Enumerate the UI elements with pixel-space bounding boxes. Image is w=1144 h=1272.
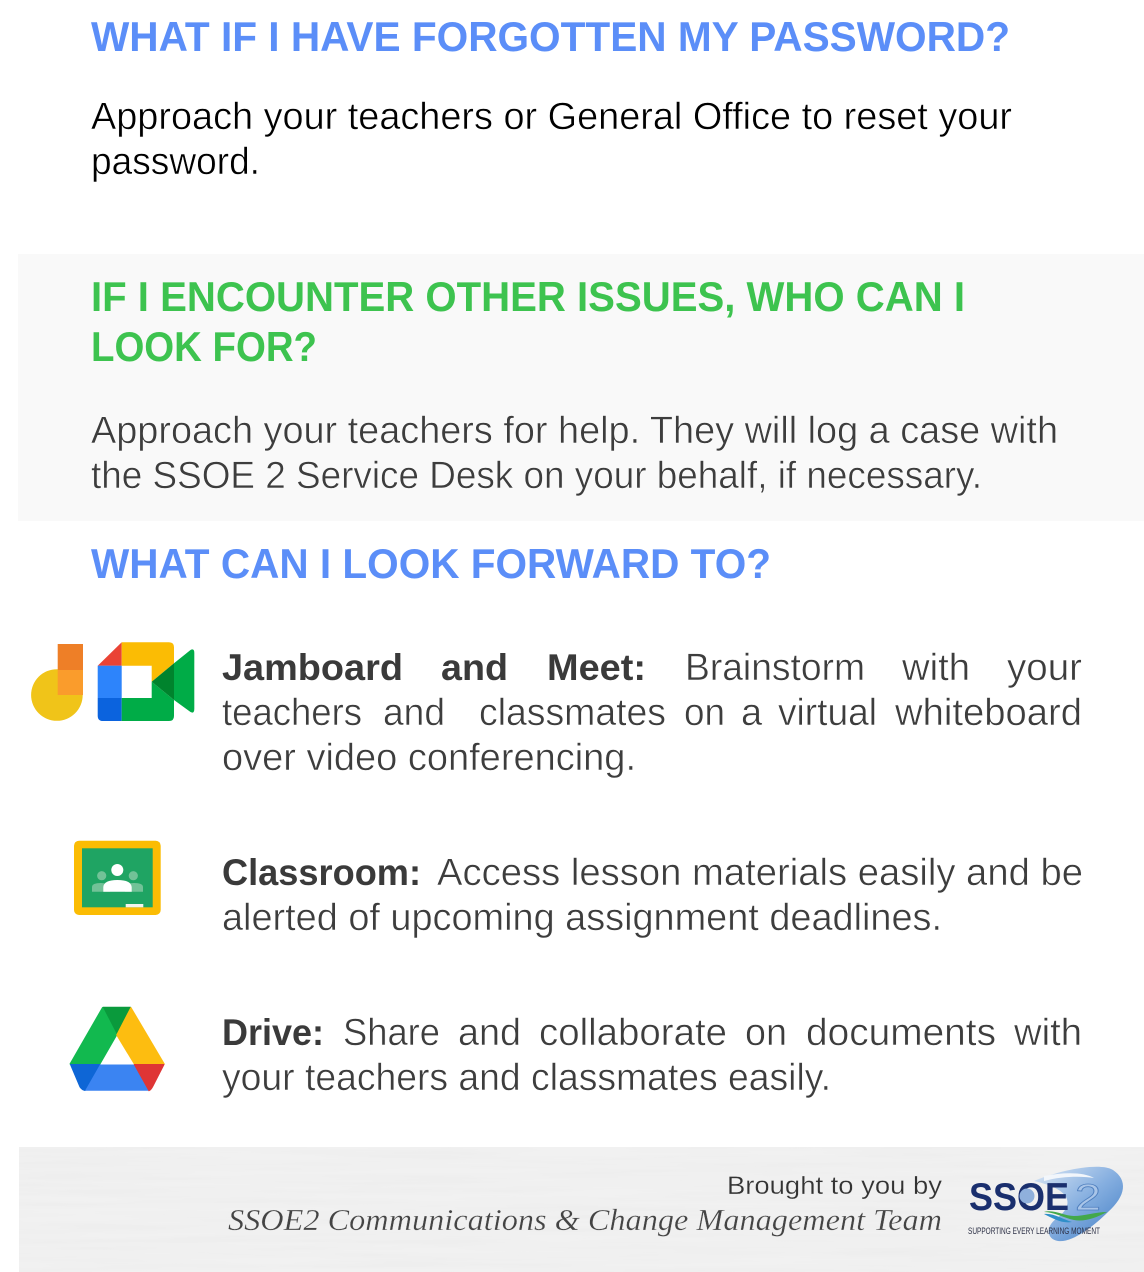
text block: jamboard and meet: Jamboard — [222, 647, 403, 688]
text block: drive: your teachers and classmates easily. — [222, 1057, 831, 1099]
text block: drive: with — [1013, 1012, 1082, 1054]
text block: jamboard and meet: a — [741, 692, 763, 734]
text block: jamboard and meet: and — [383, 692, 445, 734]
icon: google drive — [70, 1007, 164, 1091]
icon: google meet — [98, 642, 194, 721]
text block: drive: and — [458, 1012, 521, 1054]
text block: jamboard and meet: virtual — [778, 692, 877, 734]
text block: classroom: alerted of upcoming assignment deadlines. — [222, 897, 942, 939]
text block: classroom: Classroom: — [222, 852, 421, 893]
text block: drive: collaborate — [539, 1012, 727, 1054]
text block: jamboard and meet: and — [441, 647, 508, 688]
panel: forgotten password — [91, 13, 1012, 183]
text block: drive: on — [745, 1012, 787, 1054]
text block: jamboard and meet: with — [901, 647, 970, 689]
logo: SSOE 2: 2 — [1075, 1177, 1101, 1218]
text block: approach teachers: Approach your teachers for help. They will log a case with — [91, 410, 1058, 452]
icon: jamboard — [31, 644, 83, 721]
text: brought to you by: Brought to you by — [727, 1172, 943, 1200]
text block: jamboard and meet: teachers — [222, 692, 362, 734]
text block: drive: documents — [806, 1012, 996, 1054]
heading: look forward: WHAT CAN I LOOK FORWARD TO? — [91, 540, 771, 587]
text block: jamboard and meet — [222, 647, 1082, 779]
text block: drive: Drive: — [222, 1012, 324, 1053]
text block: reset password — [91, 96, 1012, 183]
heading: other issues: IF I ENCOUNTER OTHER ISSUES, WHO CAN I — [91, 273, 965, 320]
text block: approach teachers: the SSOE 2 Service Desk on your behalf, if necessary. — [91, 455, 982, 497]
logo: SSOE 2: SSOE — [969, 1176, 1069, 1219]
text block: jamboard and meet: your — [1007, 647, 1082, 689]
heading: forgotten password: WHAT IF I HAVE FORGOTTEN MY PASSWORD? — [91, 13, 1010, 60]
text block: jamboard and meet: Meet: — [547, 647, 646, 688]
text block: approach teachers — [91, 410, 1058, 497]
text block: drive — [222, 1012, 1082, 1099]
text block: drive: Share — [343, 1012, 440, 1054]
text block: jamboard and meet: classmates — [479, 692, 666, 734]
icon: google classroom — [74, 841, 161, 915]
text block: reset password: Approach your teachers or General Office to reset your — [91, 96, 1012, 138]
panel: other issues — [18, 254, 1144, 521]
text block: jamboard and meet: over video conferencing. — [222, 737, 636, 779]
text block: jamboard and meet: Brainstorm — [685, 647, 865, 689]
text block: classroom: Access lesson materials easily and be — [437, 852, 1083, 894]
heading: other issues — [91, 273, 965, 370]
panel: footer — [19, 1147, 1144, 1272]
logo: SSOE 2 — [968, 1167, 1123, 1241]
text block: reset password: password. — [91, 141, 260, 183]
heading: other issues: LOOK FOR? — [91, 323, 317, 370]
text: team credit: SSOE2 Communications & Change Management Team — [228, 1202, 942, 1237]
text block: jamboard and meet: on — [684, 692, 725, 734]
text block: classroom — [222, 852, 1083, 939]
text block: jamboard and meet: whiteboard — [894, 692, 1082, 734]
